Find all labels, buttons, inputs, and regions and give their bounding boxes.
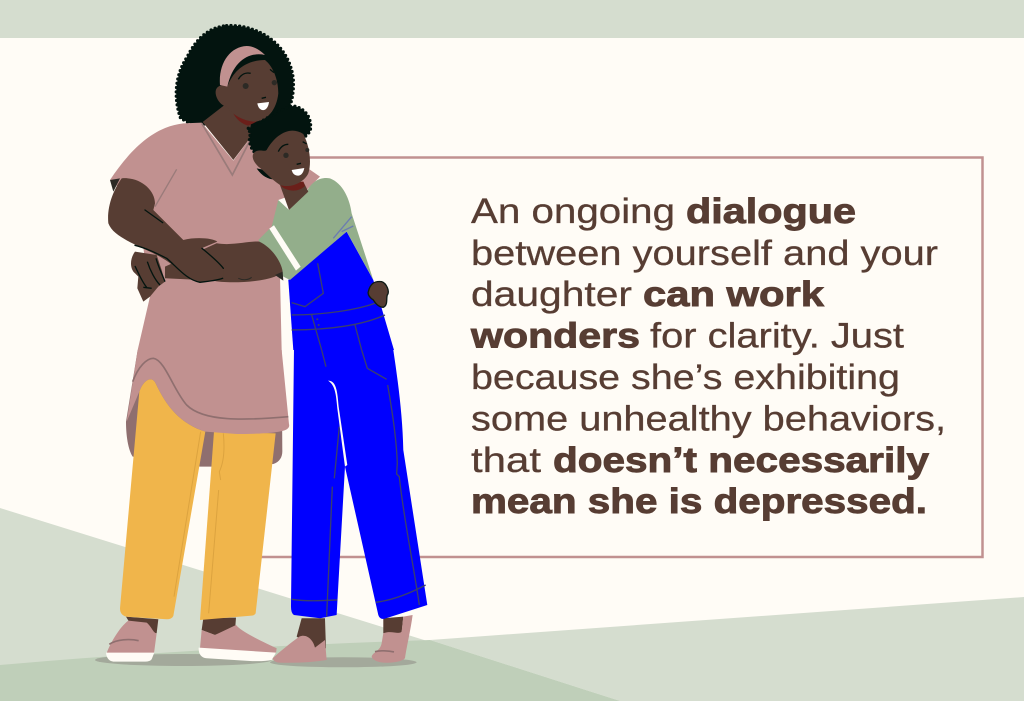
- line 1: dialogue: [686, 192, 856, 231]
- mother: lower body: [106, 350, 289, 662]
- line 2: between yourself and your: [471, 234, 938, 273]
- daughter ankles: [297, 617, 403, 648]
- daughter: lower body: [273, 350, 427, 663]
- daughter feet: [273, 636, 327, 663]
- blue trousers: [291, 350, 427, 619]
- illustration: mother hugging daughter: [95, 26, 427, 667]
- line 1: An ongoing: [471, 192, 675, 231]
- line 3: [471, 275, 825, 314]
- mother: rear hand: [131, 252, 165, 302]
- ankles: [126, 617, 236, 635]
- daughter's hand: [368, 281, 388, 307]
- line 6: some unhealthy behaviors,: [471, 400, 946, 438]
- dress back panel: [126, 350, 282, 467]
- text panel outline: [260, 158, 982, 557]
- mother: face: [216, 60, 278, 122]
- daughter: hair: [248, 106, 311, 154]
- line 8: mean she is depressed.: [471, 482, 927, 521]
- line 7: doesn’t necessarily: [553, 441, 930, 480]
- green sweater: [258, 178, 373, 280]
- shoes: [107, 621, 157, 653]
- mother: dress top: [110, 123, 320, 350]
- yellow pants: [120, 379, 205, 619]
- line 4: wonders: [470, 316, 640, 356]
- upper bodies: [108, 26, 394, 350]
- blue trousers bib: [288, 232, 394, 350]
- daughter: face: [253, 131, 310, 186]
- dress front: [127, 350, 289, 434]
- line 4: for clarity. Just: [650, 316, 904, 356]
- daughter: neck: [280, 182, 308, 210]
- mother: left arm reaching across: [165, 242, 283, 282]
- line 3: can work: [643, 275, 825, 314]
- line 4: [470, 316, 904, 356]
- mother: right arm and hand: [108, 178, 223, 283]
- line 1: [471, 192, 856, 231]
- line 7: that: [471, 441, 541, 480]
- line 3: daughter: [471, 275, 632, 314]
- ground shadows: [95, 654, 417, 667]
- line 5: because she’s exhibiting: [471, 358, 900, 397]
- mother: hair: [176, 26, 293, 127]
- mother: neck: [203, 103, 255, 160]
- text block: [470, 192, 946, 521]
